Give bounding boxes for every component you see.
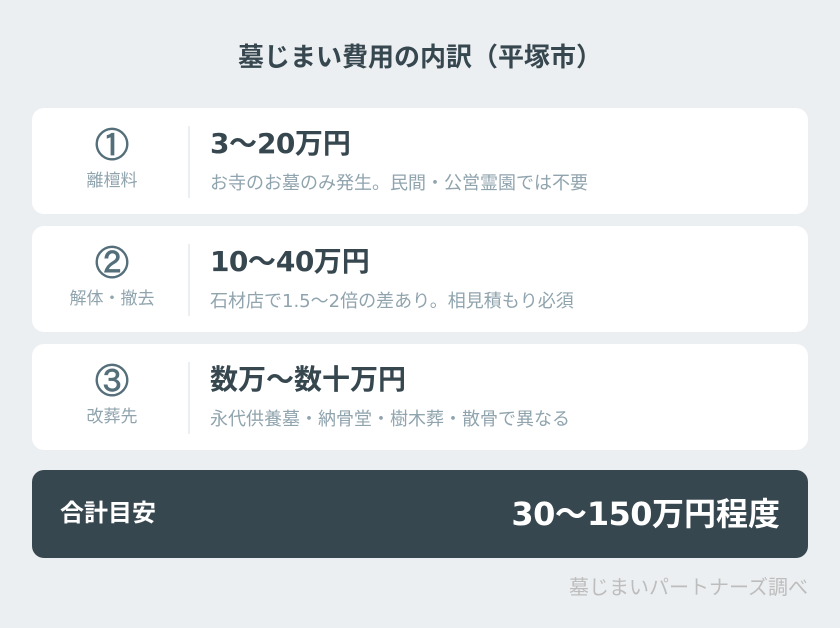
description 2: 石材店で1.5～2倍の差あり。相見積もり必須 xyxy=(210,291,574,312)
description 3: 永代供養墓・納骨堂・樹木葬・散骨で異なる xyxy=(210,409,570,430)
price 1: 3～20万円 xyxy=(210,127,351,160)
total amount: 30～150万円程度 xyxy=(511,495,780,533)
price 2: 10～40万円 xyxy=(210,245,370,278)
panel: row 1 xyxy=(32,108,808,214)
panel: total xyxy=(32,470,808,558)
price 3: 数万～数十万円 xyxy=(210,363,406,396)
panel: row 3 xyxy=(32,344,808,450)
title: 墓じまい費用の内訳（平塚市） xyxy=(238,43,602,73)
panel: row 2 xyxy=(32,226,808,332)
number 1: ① xyxy=(95,128,129,162)
source note: 墓じまいパートナーズ調べ xyxy=(569,575,808,599)
description 1: お寺のお墓のみ発生。民間・公営霊園では不要 xyxy=(210,173,588,194)
number 3: ③ xyxy=(95,364,129,398)
label 3: 改葬先 xyxy=(86,407,138,427)
total label: 合計目安 xyxy=(60,499,156,527)
label 1: 離檀料 xyxy=(86,171,138,191)
number 2: ② xyxy=(95,246,129,280)
label 2: 解体・撤去 xyxy=(70,289,154,309)
